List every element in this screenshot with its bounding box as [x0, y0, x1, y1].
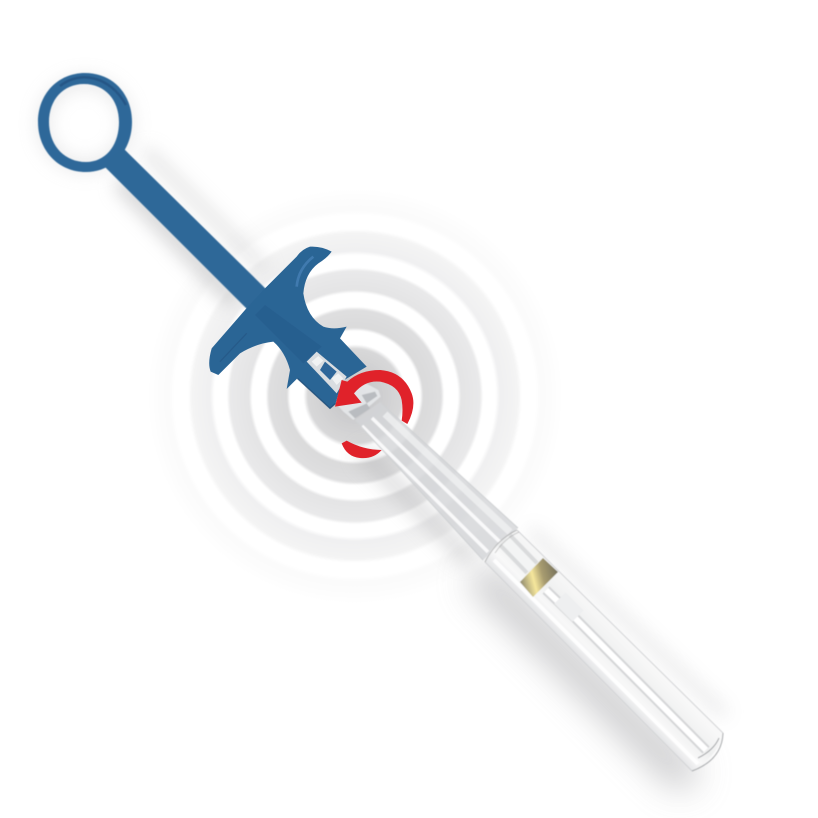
upper barrel: [355, 402, 518, 560]
rotation arrow: [335, 370, 413, 458]
drop shadows: [43, 82, 725, 782]
plunger rod inside barrel: [546, 590, 706, 750]
arrow arc with head: [335, 370, 413, 424]
lower arc segment: [342, 441, 382, 458]
syringe plunger: thumb ring and stem: [38, 73, 270, 312]
stem: [104, 147, 270, 312]
grip window: [307, 352, 347, 393]
syringe barrel: [336, 378, 723, 771]
flange and barrel grip: [209, 247, 367, 408]
concentric target rings: [145, 186, 565, 606]
lower barrel: [485, 530, 723, 771]
gold band: [520, 558, 558, 597]
hub: [336, 378, 381, 420]
collar: [485, 530, 517, 562]
thumb ring: [38, 73, 132, 172]
end cap: [692, 733, 723, 771]
